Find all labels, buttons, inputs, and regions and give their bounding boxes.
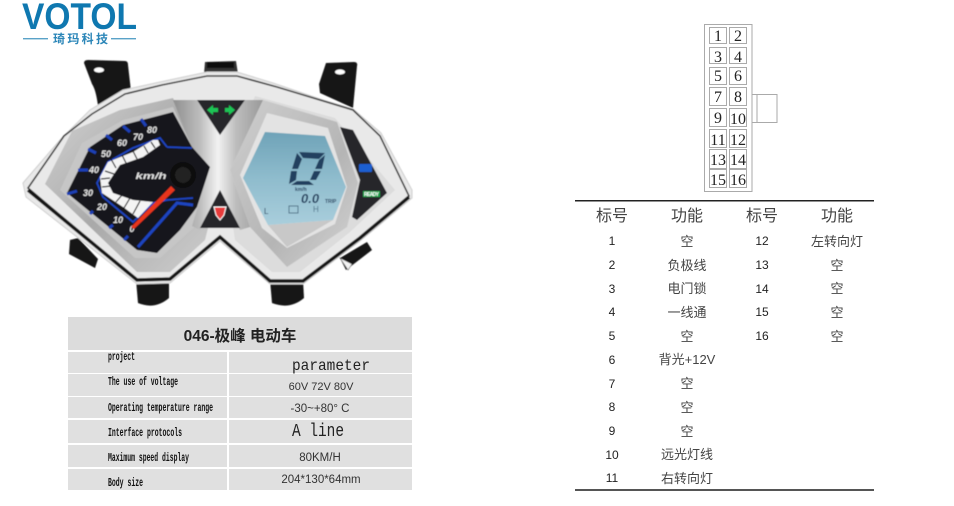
LCD display: TRIP — [325, 199, 337, 205]
warning panel — [200, 190, 240, 228]
table header — [596, 207, 853, 225]
speedometer face: 40 — [88, 165, 99, 175]
pin functions 12-16 — [811, 234, 863, 344]
connector pin diagram: 15 — [710, 172, 726, 189]
pin numbers 1-11: 7 — [609, 377, 616, 391]
red needle — [131, 186, 175, 229]
pin numbers 1-11: 9 — [609, 424, 616, 438]
connector pin diagram: 11 — [710, 132, 726, 149]
indicator panel: high beam and ready — [340, 127, 387, 220]
spec row: interface: Interface protocols — [108, 426, 182, 440]
pin functions 12-16: 空 — [830, 305, 844, 320]
LCD display: L — [264, 207, 269, 216]
spec row: voltage — [68, 374, 412, 396]
LCD bezel — [230, 100, 358, 267]
spec row: interface — [68, 420, 412, 443]
spec table title — [68, 317, 412, 350]
indicator panel: high beam and ready: READY — [364, 192, 380, 198]
pin functions 1-11: 一线通 — [667, 305, 707, 320]
spec row: project: project — [108, 350, 135, 364]
speedometer face: 50 — [101, 149, 111, 159]
outer lens — [23, 72, 412, 284]
speedometer face: km/h — [136, 171, 167, 181]
connector pin diagram: 13 — [710, 152, 726, 169]
spec row: project: parameter — [292, 357, 370, 375]
left silver band — [45, 98, 215, 272]
connector pin diagram: 14 — [730, 152, 746, 169]
pin functions 1-11: 背光+12V — [659, 352, 716, 367]
spec row: max speed: 80KM/H — [299, 452, 341, 464]
pin numbers 1-11: 8 — [609, 400, 616, 414]
pin function table — [575, 200, 874, 491]
spec row: voltage: 60V 72V 80V — [289, 381, 354, 393]
speedometer face: 10 — [113, 215, 123, 225]
spec row: max speed — [68, 445, 412, 467]
pin numbers 1-11: 5 — [609, 329, 616, 343]
digit 0 — [289, 152, 325, 185]
spec row: project — [68, 350, 412, 375]
table header: 标号 — [746, 207, 778, 225]
white speed arc — [100, 140, 160, 218]
pin numbers 1-11: 3 — [609, 282, 616, 296]
speedometer face: 60 — [117, 138, 127, 148]
center silver spine — [173, 100, 263, 230]
connector pin diagram: 10 — [730, 111, 746, 128]
connector pin diagram: 1 — [714, 28, 722, 45]
pin functions 1-11 — [659, 234, 716, 486]
spec row: temperature — [68, 397, 412, 418]
pin numbers 12-16: 16 — [755, 329, 769, 343]
speedometer face: 70 — [133, 132, 143, 142]
mounting brackets — [69, 60, 372, 306]
pin functions 12-16: 空 — [830, 281, 844, 296]
pin numbers 1-11: 2 — [609, 258, 616, 272]
connector pin diagram: 5 — [714, 68, 722, 85]
table header: 功能 — [821, 207, 853, 225]
spec row: interface: A line — [292, 422, 344, 442]
pin functions 1-11: 空 — [680, 400, 694, 415]
connector pin diagram: 6 — [734, 68, 742, 85]
pin functions 1-11: 远光灯线 — [661, 447, 713, 462]
LCD display: km/h — [295, 187, 307, 193]
connector pin diagram: 12 — [730, 132, 746, 149]
right light band — [225, 96, 395, 272]
connector pin diagram: 3 — [714, 49, 722, 66]
speedometer face: 0 — [129, 224, 135, 234]
pin functions 12-16: 空 — [830, 258, 844, 273]
LCD display — [243, 132, 346, 225]
spec row: temperature: Operating temperature range — [108, 401, 213, 415]
speedometer face: 20 — [96, 202, 107, 212]
pin functions 1-11: 空 — [680, 329, 694, 344]
rim line — [28, 76, 409, 281]
connector pin diagram — [704, 24, 777, 192]
connector pin diagram: 8 — [734, 89, 742, 106]
logo: VOTOL: 琦玛科技 — [53, 31, 108, 46]
pin numbers 12-16: 13 — [755, 258, 769, 272]
pin functions 1-11: 空 — [680, 376, 694, 391]
connector pin diagram: 2 — [734, 28, 742, 45]
pin numbers 1-11: 4 — [609, 305, 616, 319]
speedometer face: 30 — [83, 188, 93, 198]
connector pin diagram: 4 — [734, 49, 742, 66]
speedometer face — [67, 112, 210, 253]
pin functions 12-16: 空 — [830, 329, 844, 344]
spec row: body size — [68, 469, 412, 490]
bottom rim dark — [28, 190, 409, 281]
blue outline of white arc — [97, 138, 193, 222]
pin functions 12-16: 左转向灯 — [811, 234, 863, 249]
spec table — [68, 317, 412, 490]
turn signal panel — [197, 100, 245, 135]
table header: 标号 — [596, 207, 628, 225]
connector pin diagram: 7 — [714, 89, 722, 106]
table header: 功能 — [671, 207, 703, 225]
instrument cluster photo — [23, 60, 412, 306]
pin functions 1-11: 右转向灯 — [661, 471, 713, 486]
LCD display: H — [313, 205, 319, 214]
connector pin diagram: 16 — [730, 172, 746, 189]
spec row: max speed: Maximum speed display — [108, 451, 189, 465]
pin functions 1-11: 负极线 — [667, 258, 707, 273]
gauge hub — [170, 162, 196, 188]
pin functions 1-11: 电门锁 — [667, 281, 707, 296]
LCD display: 0.0 — [301, 191, 320, 206]
spec row: voltage: The use of voltage — [108, 375, 178, 389]
spec row: temperature: -30~+80° C — [291, 403, 349, 415]
spec row: body size: 204*130*64mm — [281, 474, 361, 486]
scale numbers: 80 — [147, 125, 157, 135]
pin numbers 12-16 — [755, 234, 769, 343]
spec table title: 046-极峰 电动车 — [184, 326, 296, 345]
pin numbers 12-16: 15 — [755, 305, 769, 319]
pin numbers 1-11 — [605, 234, 619, 485]
spec row: body size: Body size — [108, 476, 143, 490]
pin functions 1-11: 空 — [680, 424, 694, 439]
pin functions 1-11: 空 — [680, 234, 694, 249]
pin numbers 12-16: 14 — [755, 282, 769, 296]
pin numbers 1-11: 1 — [609, 234, 616, 248]
pin numbers 1-11: 6 — [609, 353, 616, 367]
blue scale ticks — [67, 119, 146, 240]
pin numbers 1-11: 11 — [606, 471, 619, 485]
connector pin diagram: 9 — [714, 110, 722, 127]
pin numbers 12-16: 12 — [755, 234, 769, 248]
pin numbers 1-11: 10 — [605, 448, 619, 462]
